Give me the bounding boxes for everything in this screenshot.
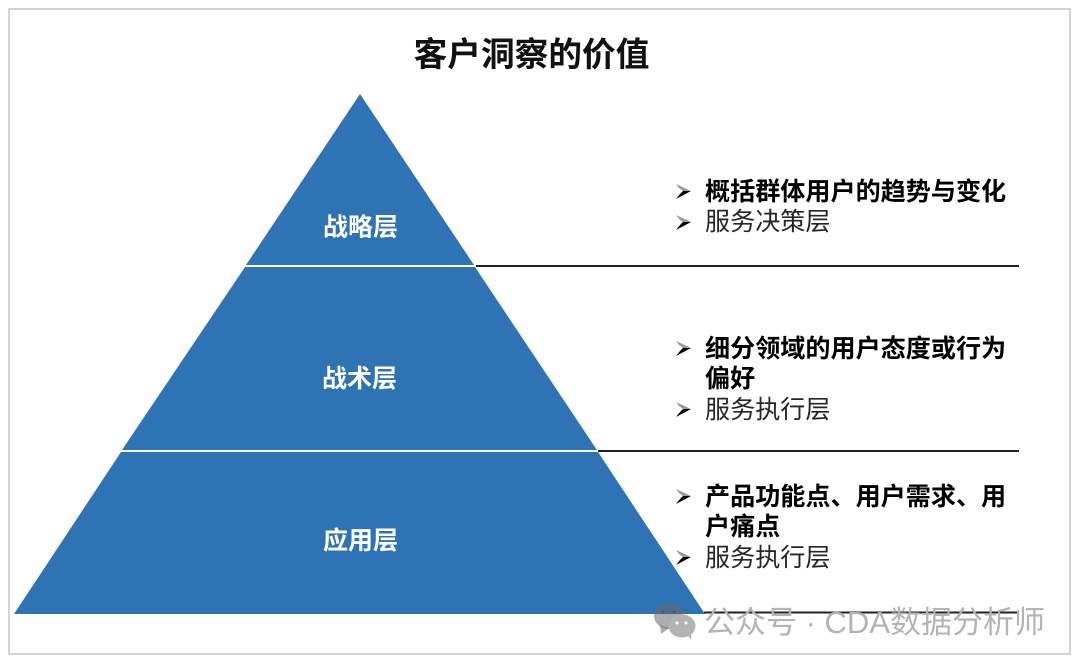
divider line 1 [476, 265, 1019, 267]
divider line 2 [598, 450, 1019, 452]
watermark [654, 603, 1045, 640]
text block: tactical [676, 335, 1006, 424]
pyramid tier: strategic: 战略层 [323, 214, 398, 242]
pyramid tier: tactical [122, 267, 597, 450]
icon: bullet arrow [676, 402, 691, 417]
text block: application: 产品功能点、用户需求、用 [705, 483, 1006, 511]
icon: bullet arrow [676, 489, 691, 504]
icon: bullet arrow [676, 341, 691, 356]
title: 客户洞察的价值 [414, 36, 649, 74]
text block: strategic: 概括群体用户的趋势与变化 [705, 178, 1006, 206]
pyramid tier: tactical: 战术层 [322, 365, 397, 393]
icon: wechat [654, 603, 696, 640]
text block: strategic [676, 178, 1006, 236]
icon: bullet arrow [676, 215, 691, 230]
icon: bullet arrow [676, 550, 691, 565]
text block: strategic: 服务决策层 [705, 208, 830, 236]
pyramid tier: strategic [246, 94, 474, 265]
icon: bullet arrow [676, 184, 691, 199]
text block: tactical: 细分领域的用户态度或行为 [705, 335, 1006, 363]
text block: tactical: 服务执行层 [705, 396, 830, 424]
pyramid tier: application: 应用层 [323, 526, 398, 555]
text block: application: 户痛点 [705, 513, 780, 541]
text block: tactical: 偏好 [705, 365, 755, 393]
divider line 3 [704, 612, 1019, 614]
text block: application: 服务执行层 [705, 544, 830, 572]
pyramid tier: application [14, 452, 705, 614]
text block: application [676, 483, 1006, 572]
watermark text: 公众号 · CDA数据分析师 [704, 605, 1045, 640]
